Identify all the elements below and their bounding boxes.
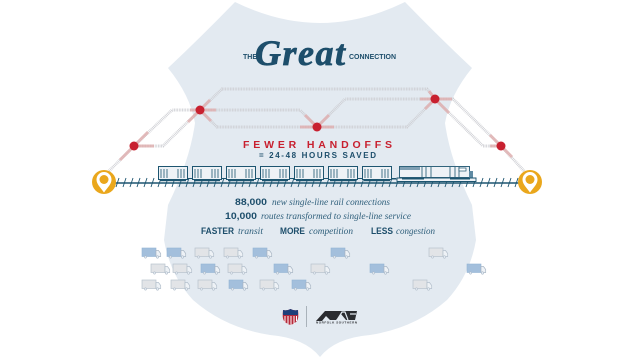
benefits: MORE: [280, 226, 305, 236]
shield background: [164, 2, 476, 357]
benefits: [201, 226, 435, 237]
logo: Norfolk Southern: NORFOLK SOUTHERN: [316, 320, 357, 324]
stat: routes: 10,000: [225, 211, 257, 221]
title: [243, 33, 396, 73]
stat: connections: 88,000: [235, 197, 267, 207]
stat: routes: routes transformed to single-line service: [261, 211, 411, 222]
title: Great: [255, 33, 346, 73]
heading: fewer handoffs: FEWER HANDOFFS: [243, 139, 392, 151]
title: CONNECTION: [349, 52, 396, 61]
railway track: [112, 178, 526, 187]
stat: connections: [235, 197, 390, 208]
benefits: FASTER: [201, 226, 235, 236]
logo: Union Pacific shield: [283, 309, 298, 325]
handoff nodes: [130, 94, 506, 150]
icon: end pin: [518, 170, 542, 194]
divider: [306, 306, 307, 327]
benefits: competition: [309, 227, 353, 237]
subheading: hours saved: = 24-48 HOURS SAVED: [259, 151, 376, 160]
benefits: congestion: [396, 227, 435, 237]
title: THE: [243, 52, 257, 61]
trucks: [142, 248, 486, 290]
locomotive: [392, 166, 476, 182]
logo: Norfolk Southern: [316, 311, 357, 324]
benefits: LESS: [371, 226, 393, 236]
train cars: [158, 166, 396, 181]
benefits: transit: [238, 227, 263, 237]
stat: connections: new single-line rail connections: [272, 198, 390, 208]
icon: start pin: [92, 170, 116, 194]
rail network routes: [108, 89, 525, 172]
